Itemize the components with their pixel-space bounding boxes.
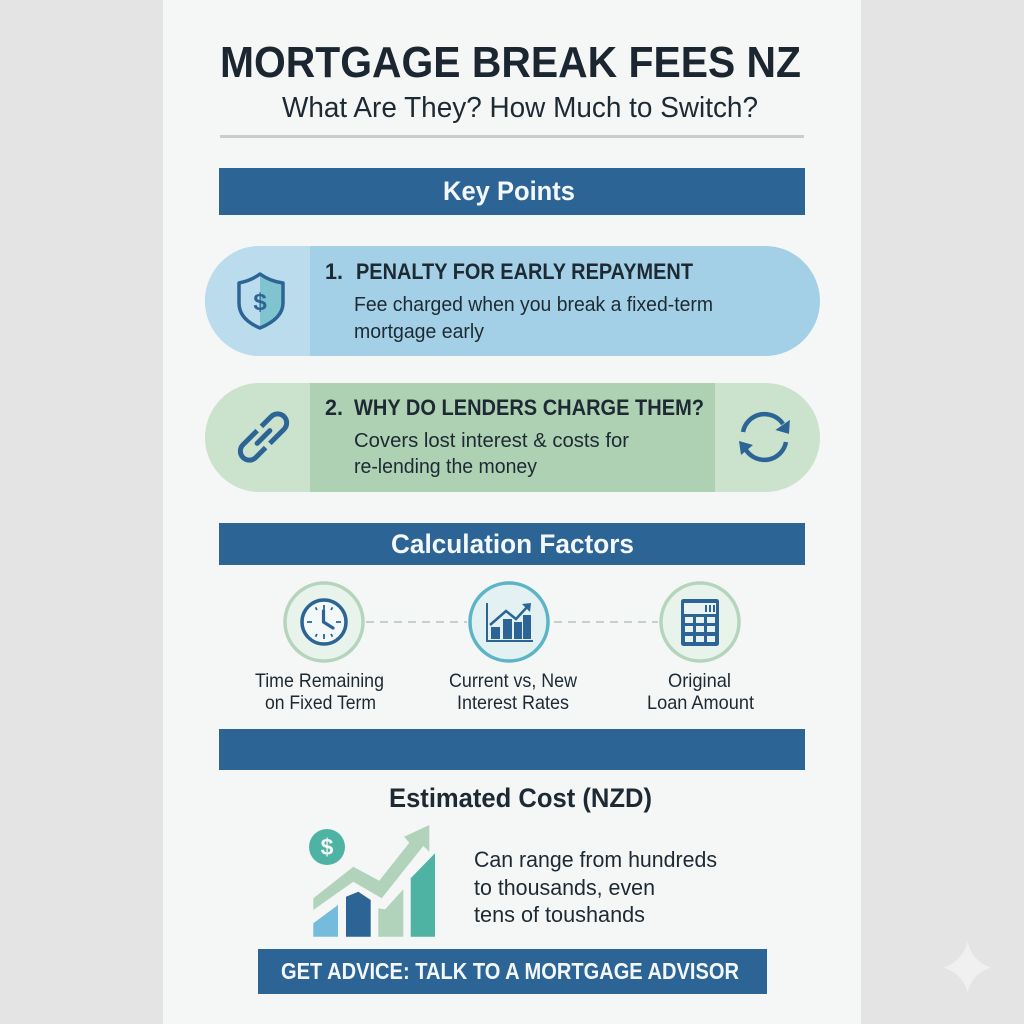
label: loan amount [647,670,755,714]
call to action button [258,949,767,994]
label: interest rates: Interest Rates [457,692,569,714]
factor: interest rates [449,583,578,714]
label: loan amount: Loan Amount [647,692,755,714]
icon: rising chart [470,583,548,661]
dollar coin: $ [321,834,334,860]
icon: clock [285,583,363,661]
dashed connectors [366,621,658,623]
factor: time remaining [255,583,384,714]
point 2 heading: 2. [325,395,343,420]
point 2 body: Covers lost interest & costs for [354,429,629,452]
point 1 heading: 1. [325,259,343,284]
central white panel [163,0,861,1024]
heading: calculation factors: Calculation Factors [391,529,634,559]
icon: growth chart with dollar coin [309,825,435,937]
title rule [220,135,804,138]
label: time remaining: Time Remaining [255,670,384,692]
point 2 heading: WHY DO LENDERS CHARGE THEM? [354,395,704,420]
cost description: tens of toushands [474,902,645,927]
label: interest rates: Current vs, New [449,670,578,692]
pill background [205,383,820,492]
factor: loan amount [647,583,755,714]
cost description [474,847,717,927]
icon: shield with dollar: $ [253,289,267,316]
empty blue heading bar [219,729,805,770]
cost description: to thousands, even [474,875,655,900]
icon: sparkle watermark [943,942,991,992]
title: MORTGAGE BREAK FEES NZ [220,38,801,87]
subtitle: What Are They? How Much to Switch? [282,92,758,124]
point 1 body [354,293,713,343]
calculation factors row [255,583,755,714]
heading: key points: Key Points [443,176,575,206]
point 1 body: Fee charged when you break a fixed-term [354,293,713,316]
estimated cost heading: Estimated Cost (NZD) [389,783,652,813]
panel: penalty for early repayment [205,246,820,356]
pill left section [205,246,310,356]
call to action button: GET ADVICE: TALK TO A MORTGAGE ADVISOR [281,958,739,984]
title block [220,38,804,138]
icon: chain link [237,410,290,464]
label: time remaining: on Fixed Term [265,692,376,714]
label: loan amount: Original [668,670,731,692]
point 2 body [354,429,629,478]
icon: shield with dollar [239,274,283,329]
icon: refresh arrows [739,414,791,460]
point 2 body: re-lending the money [354,455,538,478]
icon: calculator [661,583,739,661]
rising arrow [313,825,429,910]
pill centre section [310,383,715,492]
pill background [205,246,820,356]
heading: calculation factors [219,523,805,565]
label: interest rates [449,670,578,714]
label: time remaining [255,670,384,714]
point 1 heading: PENALTY FOR EARLY REPAYMENT [356,259,693,284]
bars [313,853,435,937]
cost description: Can range from hundreds [474,847,717,872]
panel: why do lenders charge them [205,383,820,492]
point 1 body: mortgage early [354,320,485,343]
heading: key points [219,168,805,215]
